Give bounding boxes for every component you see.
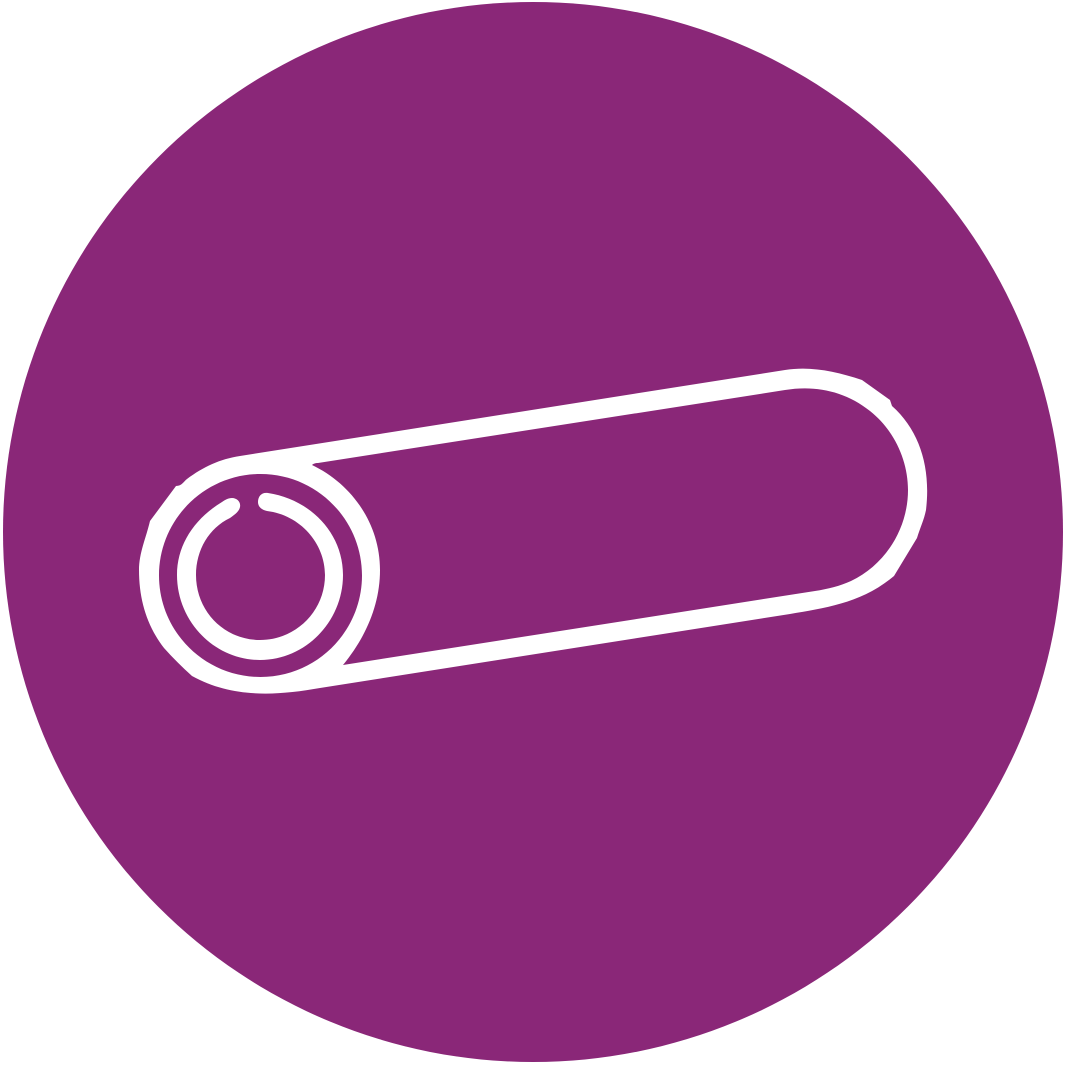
icon: rolled tube — [139, 369, 927, 694]
inner spiral — [177, 493, 343, 660]
tube outer outline — [139, 369, 927, 694]
